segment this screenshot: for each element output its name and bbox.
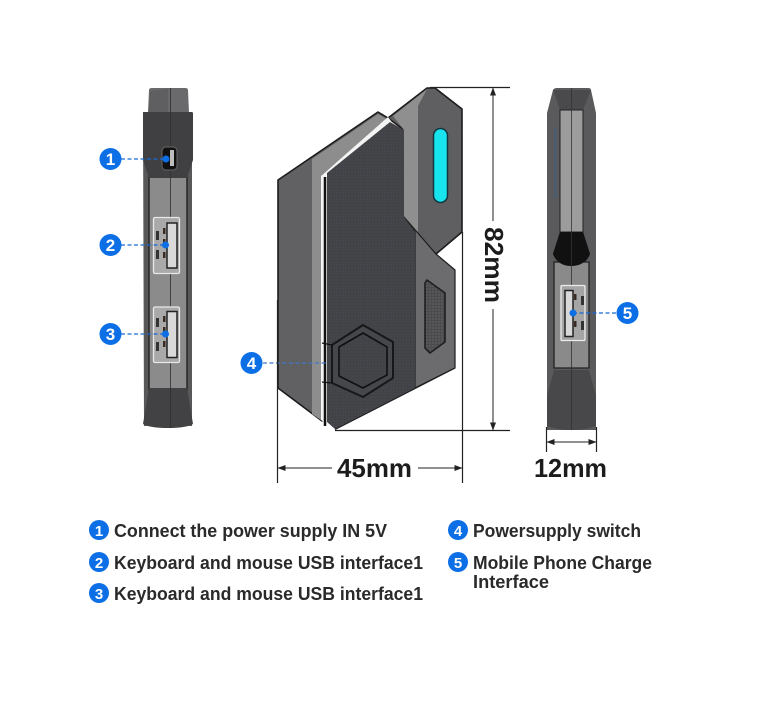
dimension: height 82mm: 82mm [479, 227, 509, 303]
port: USB-C power input [162, 147, 177, 170]
callout 5 [570, 302, 638, 324]
callout 2 [100, 234, 169, 256]
callout 4: 4 [247, 354, 257, 373]
port: USB interface 2 [154, 307, 180, 362]
legend item 1: Connect the power supply IN 5V [114, 521, 387, 541]
legend item 5: Mobile Phone Charge [473, 553, 652, 573]
legend item 5: Interface [473, 572, 549, 592]
legend item 4: 4 [454, 523, 463, 540]
left shell [278, 112, 388, 421]
centre front view of device [278, 88, 462, 430]
callout 1 [100, 148, 170, 170]
hexagonal power switch [322, 325, 393, 397]
callout 4 [240, 352, 328, 374]
legend item 5: 5 [454, 555, 462, 572]
dimension: width 45mm: 45mm [337, 453, 412, 483]
legend item 3: 3 [95, 586, 103, 603]
callout 2: 2 [106, 236, 115, 255]
white stripe [321, 117, 391, 424]
textured front panel [327, 122, 415, 429]
right side view of device [547, 88, 596, 430]
lower right shell [404, 217, 455, 388]
legend item 5 [448, 552, 652, 592]
dimension: thickness 12mm [534, 427, 607, 483]
legend item 2: Keyboard and mouse USB interface1 [114, 553, 423, 573]
side vent slot [425, 280, 445, 353]
legend item 4: Powersupply switch [473, 521, 641, 541]
port: USB interface 1 [154, 218, 180, 274]
callout 3: 3 [106, 325, 115, 344]
upper right shell [388, 88, 462, 254]
callout 3 [100, 323, 169, 345]
callout 5: 5 [623, 304, 632, 323]
callout 1: 1 [106, 150, 115, 169]
cyan LED indicator [434, 128, 448, 202]
legend item 1: 1 [95, 523, 103, 540]
port: phone charge USB [561, 286, 585, 340]
legend item 3: Keyboard and mouse USB interface1 [114, 584, 423, 604]
left side view of device [143, 88, 193, 428]
legend item 2: 2 [95, 555, 103, 572]
dimension: thickness 12mm: 12mm [534, 453, 607, 483]
